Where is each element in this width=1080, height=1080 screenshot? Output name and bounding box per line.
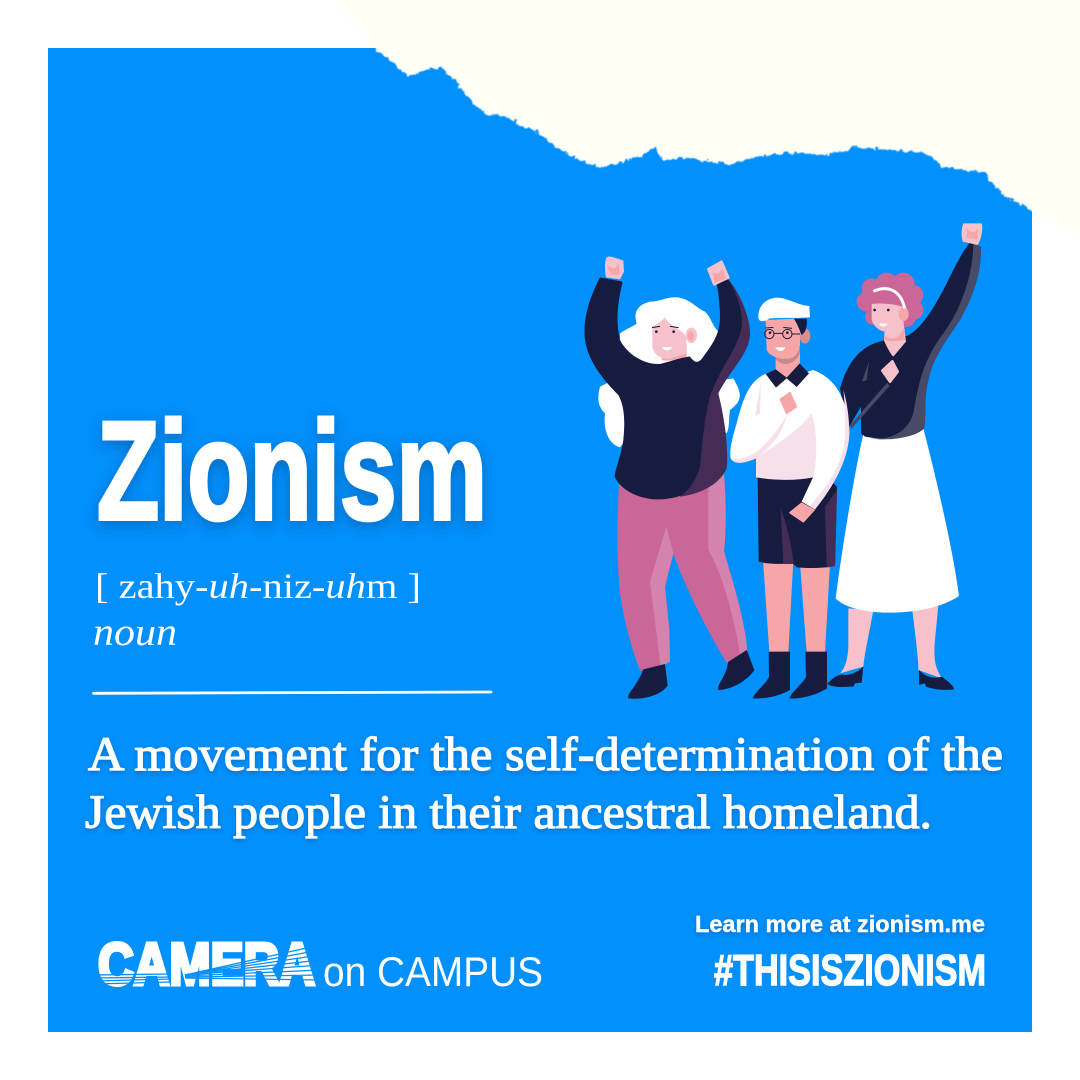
title: Zionism: Zionism xyxy=(97,392,487,549)
illustration: three people cheering xyxy=(584,223,982,699)
logo: CAMERA on CAMPUS xyxy=(94,932,543,998)
figure: woman with pink hair xyxy=(827,223,982,690)
website call to action: Learn more at zionism.me xyxy=(695,911,985,937)
definition text: A movement for the self-determination of the xyxy=(88,728,1003,781)
divider under pronunciation xyxy=(94,692,491,693)
pronunciation: [ zahy- uh-niz-uhm ] xyxy=(95,566,421,606)
hashtag: #THISISZIONISM xyxy=(714,946,986,995)
torn cream paper corner xyxy=(325,0,1080,248)
logo text on CAMPUS: on CAMPUS xyxy=(323,948,543,995)
figure: boy with glasses xyxy=(730,298,849,699)
logo wordmark CAMERA: CAMERA xyxy=(98,932,315,998)
figure: woman with white hair xyxy=(584,257,754,699)
definition text xyxy=(85,728,1003,839)
definition text: Jewish people in their ancestral homeland. xyxy=(85,786,932,839)
part of speech: noun: noun xyxy=(93,611,177,654)
